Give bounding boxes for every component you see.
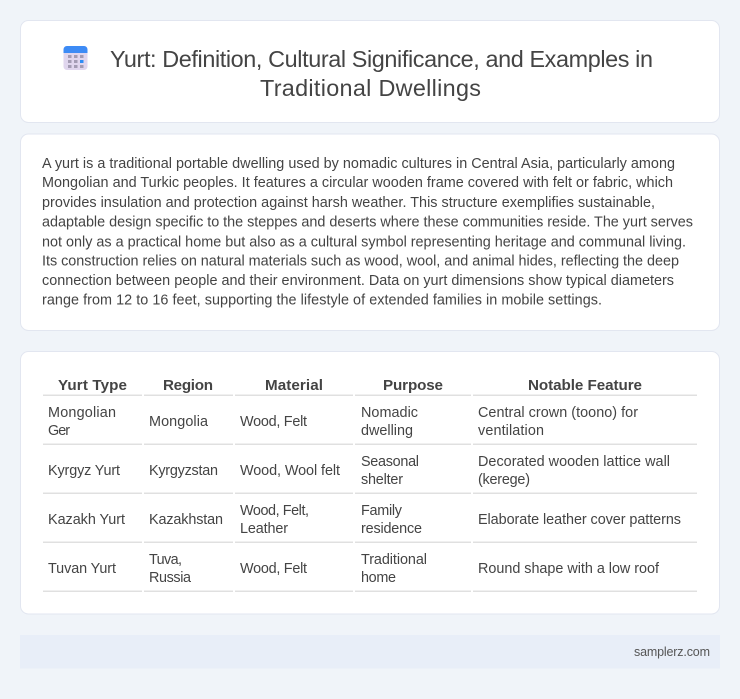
table row: Mongolian Ger: Nomadic [361, 405, 418, 421]
icon: calendar [64, 46, 88, 70]
panel: description [20, 134, 720, 330]
title [110, 46, 653, 101]
table row: Tuvan Yurt: Round shape with a low roof [478, 561, 660, 577]
table row: Mongolian Ger: dwelling [361, 423, 413, 439]
table row: Mongolian Ger: Mongolian [48, 405, 116, 421]
table row: Kyrgyz Yurt: Decorated wooden lattice wall [478, 454, 670, 470]
footer [20, 635, 720, 668]
table header [43, 377, 697, 396]
table row: Tuvan Yurt: Russia [149, 570, 191, 586]
text block: yurt description: not only as a practical home but also as a cultural symbol representing heritage and communal living. [42, 234, 686, 250]
table row: Kyrgyz Yurt [43, 454, 697, 494]
table row: Kazakh Yurt: Kazakhstan [149, 512, 223, 528]
table row: Kazakh Yurt [43, 503, 697, 543]
table row: Mongolian Ger: Wood, Felt [240, 414, 307, 430]
table row: Kazakh Yurt: residence [361, 521, 422, 537]
table row: Tuvan Yurt: Wood, Felt [240, 561, 307, 577]
table row: Tuvan Yurt: Tuva, [149, 552, 182, 568]
text block: yurt description: Mongolian and Turkic peoples. It features a circular wooden frame covered with felt or fabric, which [42, 175, 673, 191]
text block: yurt description: A yurt is a traditional portable dwelling used by nomadic cultures in Central Asia, particularly among [42, 156, 675, 172]
table header: Yurt Type [58, 377, 127, 394]
title: Traditional Dwellings [260, 75, 481, 101]
table row: Tuvan Yurt [43, 552, 697, 592]
table row: Kyrgyz Yurt: Kyrgyz Yurt [48, 463, 120, 479]
table header: Notable Feature [528, 377, 642, 394]
table row: Kyrgyz Yurt: (kerege) [478, 472, 530, 488]
table row: Kazakh Yurt: Elaborate leather cover patterns [478, 512, 681, 528]
table row: Kazakh Yurt: Family [361, 503, 403, 519]
text block: yurt description: range from 12 to 16 feet, supporting the lifestyle of extended families in mobile settings. [42, 292, 602, 308]
table header: Region [163, 377, 213, 394]
footer: samplerz.com [634, 645, 710, 659]
table row: Tuvan Yurt: Traditional [361, 552, 427, 568]
table row: Mongolian Ger: Central crown (toono) for [478, 405, 638, 421]
table row: Mongolian Ger: ventilation [478, 423, 544, 439]
panel: table [20, 352, 720, 614]
text block: yurt description: Its construction relies on natural materials such as wood, wool, and animal hides, reflecting the deep [42, 254, 679, 270]
text block: yurt description: adaptable design specific to the steppes and deserts where these communities reside. The yurt serves [42, 214, 693, 230]
table row: Kyrgyz Yurt: shelter [361, 472, 403, 488]
title: Yurt: Definition, Cultural Significance, and Examples in [110, 46, 653, 72]
table header: Purpose [383, 377, 443, 394]
text block: yurt description: connection between people and their environment. Data on yurt dimensions show typical diameters [42, 273, 674, 289]
text block: yurt description [42, 156, 693, 308]
table row: Tuvan Yurt: Tuvan Yurt [48, 561, 116, 577]
panel: title card [20, 20, 720, 122]
table row: Mongolian Ger: Mongolia [149, 414, 208, 430]
table row: Mongolian Ger: Ger [48, 423, 70, 439]
table row: Kyrgyz Yurt: Seasonal [361, 454, 419, 470]
table row: Kyrgyz Yurt: Kyrgyzstan [149, 463, 218, 479]
table row: Kyrgyz Yurt: Wood, Wool felt [240, 463, 340, 479]
table row: Mongolian Ger [43, 405, 697, 445]
table row: Kazakh Yurt: Leather [240, 521, 288, 537]
text block: yurt description: provides insulation and protection against harsh weather. This structure exemplifies sustainable, [42, 195, 655, 211]
table header: Material [265, 377, 323, 394]
table row: Tuvan Yurt: home [361, 570, 396, 586]
table row: Kazakh Yurt: Kazakh Yurt [48, 512, 125, 528]
table row: Kazakh Yurt: Wood, Felt, [240, 503, 309, 519]
